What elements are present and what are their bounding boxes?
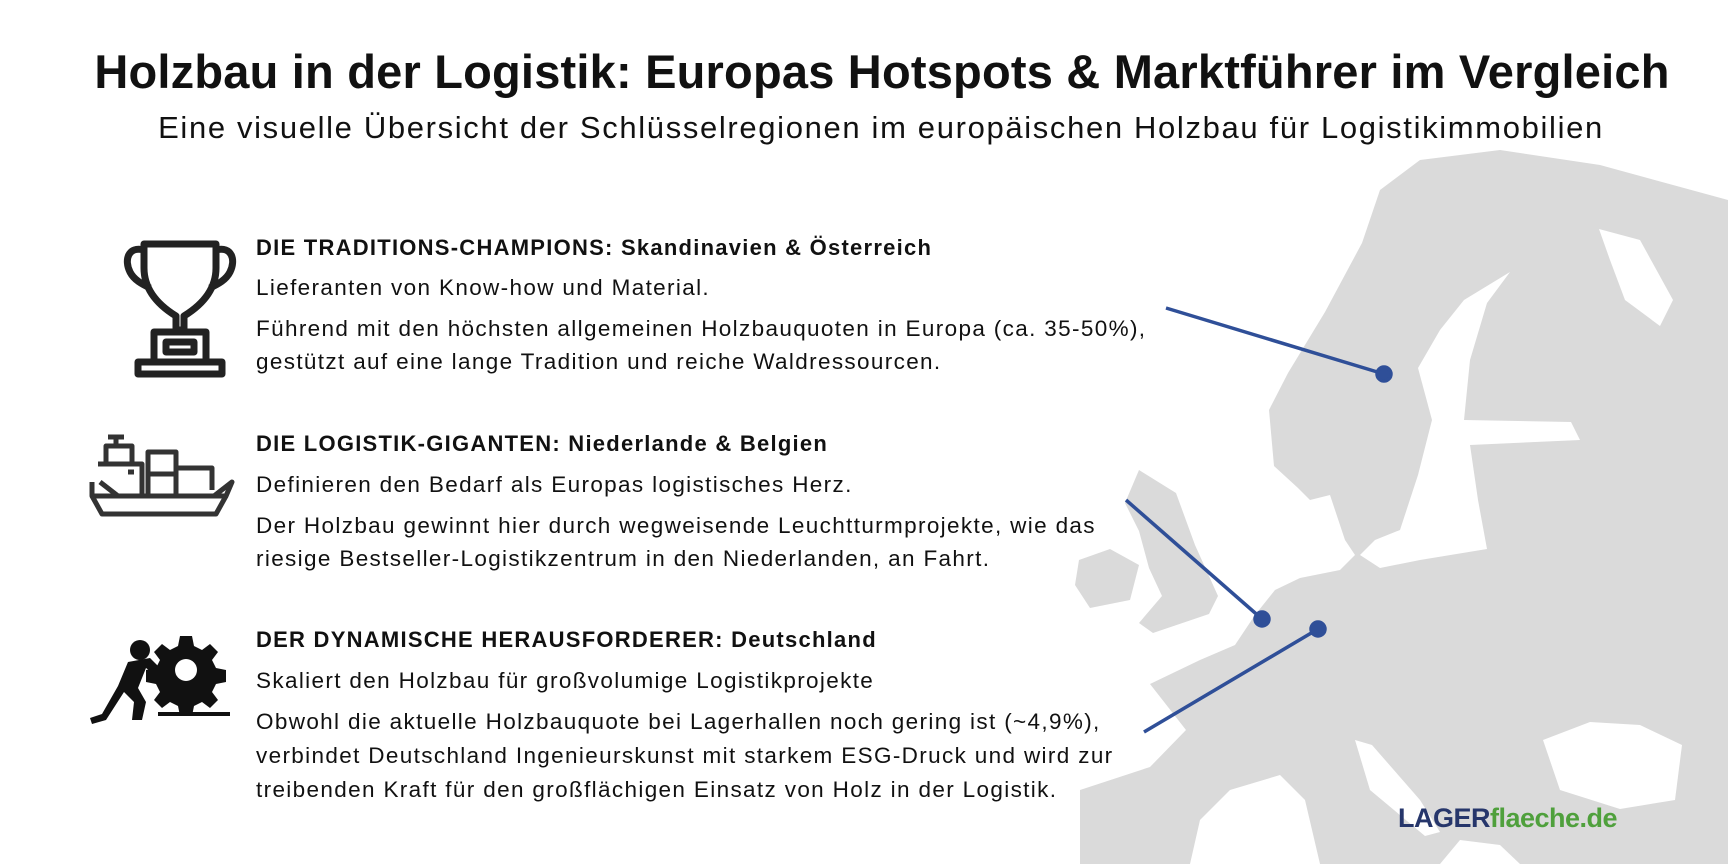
section 3: Dynamische Herausforderer xyxy=(256,627,1114,802)
subtitle: Eine visuelle Übersicht der Schlüsselregionen im europäischen Holzbau für Logistikimmobilien xyxy=(158,110,1604,145)
text: riesige Bestseller-Logistikzentrum in den Niederlanden, an Fahrt. xyxy=(256,546,990,571)
text: treibenden Kraft für den großflächigen Einsatz von Holz in der Logistik. xyxy=(256,777,1057,802)
icon: trophy xyxy=(124,240,236,378)
text: Der Holzbau gewinnt hier durch wegweisende Leuchtturmprojekte, wie das xyxy=(256,513,1096,538)
text: verbindet Deutschland Ingenieurskunst mit starkem ESG-Druck und wird zur xyxy=(256,743,1114,768)
text: DIE TRADITIONS-CHAMPIONS: Skandinavien & Österreich xyxy=(256,235,932,260)
text: DER DYNAMISCHE HERAUSFORDERER: Deutschland xyxy=(256,627,877,652)
text: Obwohl die aktuelle Holzbauquote bei Lagerhallen noch gering ist (~4,9%), xyxy=(256,709,1101,734)
text: Lieferanten von Know-how und Material. xyxy=(256,275,710,300)
icon: person pushing gear xyxy=(90,636,230,724)
text: DIE LOGISTIK-GIGANTEN: Niederlande & Belgien xyxy=(256,431,828,456)
text: Führend mit den höchsten allgemeinen Holzbauquoten in Europa (ca. 35-50%), xyxy=(256,316,1146,341)
text: Definieren den Bedarf als Europas logistisches Herz. xyxy=(256,472,853,497)
logo: LAGERflaeche.de xyxy=(1398,803,1617,833)
text: Skaliert den Holzbau für großvolumige Logistikprojekte xyxy=(256,668,874,693)
title: Holzbau in der Logistik: Europas Hotspots & Marktführer im Vergleich xyxy=(94,45,1670,98)
section 2: Logistik-Giganten xyxy=(256,431,1096,571)
text: gestützt auf eine lange Tradition und reiche Waldressourcen. xyxy=(256,349,942,374)
icon: container ship xyxy=(90,434,234,516)
section 1: Traditions-Champions xyxy=(256,235,1146,374)
